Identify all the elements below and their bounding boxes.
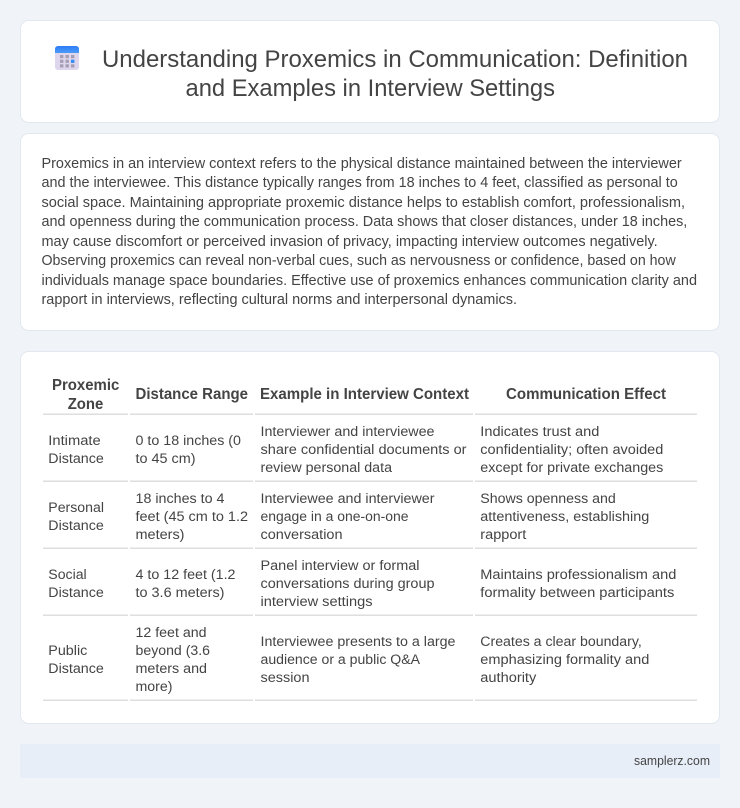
table row: public distance xyxy=(43,625,697,701)
table row: personal distance: meters) xyxy=(136,527,184,543)
table: proxemic zones xyxy=(43,377,697,701)
table row: intimate distance: share confidential documents or xyxy=(260,442,467,458)
table row: public distance: Distance xyxy=(48,661,104,677)
title: Understanding Proxemics in Communication: Definition xyxy=(102,46,688,73)
table row: social distance: to 3.6 meters) xyxy=(136,585,224,601)
table row: personal distance: engage in a one-on-one xyxy=(260,509,409,525)
table row: public distance: emphasizing formality and xyxy=(480,652,649,668)
table header row: Zone xyxy=(68,396,104,413)
table row: personal distance: Interviewee and interviewer xyxy=(260,491,435,507)
table row: intimate distance: Intimate xyxy=(48,433,101,449)
text block: proxemics definition xyxy=(42,156,697,308)
table row: personal distance: Shows openness and xyxy=(480,491,616,507)
table row: social distance: interview settings xyxy=(260,594,372,610)
footer source text: samplerz.com xyxy=(634,753,710,768)
table row: intimate distance: Interviewer and interviewee xyxy=(260,424,435,440)
table row: social distance: Panel interview or formal xyxy=(260,558,420,574)
text block: proxemics definition: may cause discomfort or perceived invasion of privacy, impacting interview outcomes negatively. xyxy=(42,234,658,250)
text block: proxemics definition: Proxemics in an interview context refers to the physical distance maintained between the interviewer xyxy=(42,156,682,172)
table row: social distance: Maintains professionalism and xyxy=(480,567,676,583)
table row: personal distance: rapport xyxy=(480,527,526,543)
table row: personal distance: Distance xyxy=(48,518,104,534)
text block: proxemics definition: individuals manage space boundaries. Effective use of proxemics enhances communication clarity and xyxy=(42,273,697,289)
table header row: Example in Interview Context xyxy=(260,386,469,403)
table row: social distance xyxy=(43,558,697,616)
table row: public distance: authority xyxy=(480,670,537,686)
table header row: Proxemic xyxy=(52,377,120,394)
text block: proxemics definition: rapport in interviews, reflecting cultural norms and interpersonal dynamics. xyxy=(42,292,517,308)
table row: public distance: Creates a clear boundary, xyxy=(480,634,642,650)
table row: intimate distance: confidentiality; often avoided xyxy=(480,442,663,458)
table row: social distance: 4 to 12 feet (1.2 xyxy=(136,567,236,583)
text block: proxemics definition: and openness during the communication process. Data shows that closer distances, under 18 inches, xyxy=(42,214,687,230)
table row: intimate distance: 0 to 18 inches (0 xyxy=(136,433,241,449)
table row: intimate distance: Distance xyxy=(48,451,104,467)
table row: intimate distance: Indicates trust and xyxy=(480,424,599,440)
table row: intimate distance: except for private exchanges xyxy=(480,460,663,476)
table row: public distance: more) xyxy=(136,679,172,695)
table row: intimate distance: review personal data xyxy=(260,460,392,476)
table row: personal distance: 18 inches to 4 xyxy=(136,491,225,507)
table row: public distance: session xyxy=(260,670,310,686)
table row: social distance: conversations during group xyxy=(260,576,435,592)
table header row: Communication Effect xyxy=(506,386,666,403)
table row: public distance: Public xyxy=(48,643,87,659)
table row: personal distance: feet (45 cm to 1.2 xyxy=(136,509,248,525)
table row: public distance: Interviewee presents to a large xyxy=(260,634,456,650)
table row: public distance: audience or a public Q&A xyxy=(260,652,421,668)
footer bar xyxy=(20,744,720,778)
table row: social distance: Social xyxy=(48,567,87,583)
text block: proxemics definition: social space. Maintaining appropriate proxemic distance helps to establish comfort, professionalism, xyxy=(42,195,685,211)
icon: calendar xyxy=(55,46,79,70)
panel: description card xyxy=(20,134,720,330)
title: and Examples in Interview Settings xyxy=(186,75,555,102)
table row: public distance: beyond (3.6 xyxy=(136,643,210,659)
table row: public distance: meters and xyxy=(136,661,207,677)
table header row: Distance Range xyxy=(136,386,248,403)
text block: proxemics definition: Observing proxemics can reveal non-verbal cues, such as nervousness or confidence, based on how xyxy=(42,253,676,269)
text block: proxemics definition: and the interviewee. This distance typically ranges from 18 inches to 4 feet, classified as personal to xyxy=(42,175,678,191)
title xyxy=(102,46,688,102)
table row: public distance: 12 feet and xyxy=(136,625,206,641)
table row: intimate distance xyxy=(43,424,697,482)
table row: intimate distance: to 45 cm) xyxy=(136,451,196,467)
table row: social distance: formality between participants xyxy=(480,585,674,601)
table row: personal distance: conversation xyxy=(260,527,342,543)
table row: personal distance: attentiveness, establishing xyxy=(480,509,649,525)
table row: social distance: Distance xyxy=(48,585,104,601)
table row: personal distance: Personal xyxy=(48,500,104,516)
table row: personal distance xyxy=(43,491,697,549)
panel: table card xyxy=(20,352,720,724)
panel: title card xyxy=(20,20,720,122)
table header row xyxy=(43,377,697,415)
